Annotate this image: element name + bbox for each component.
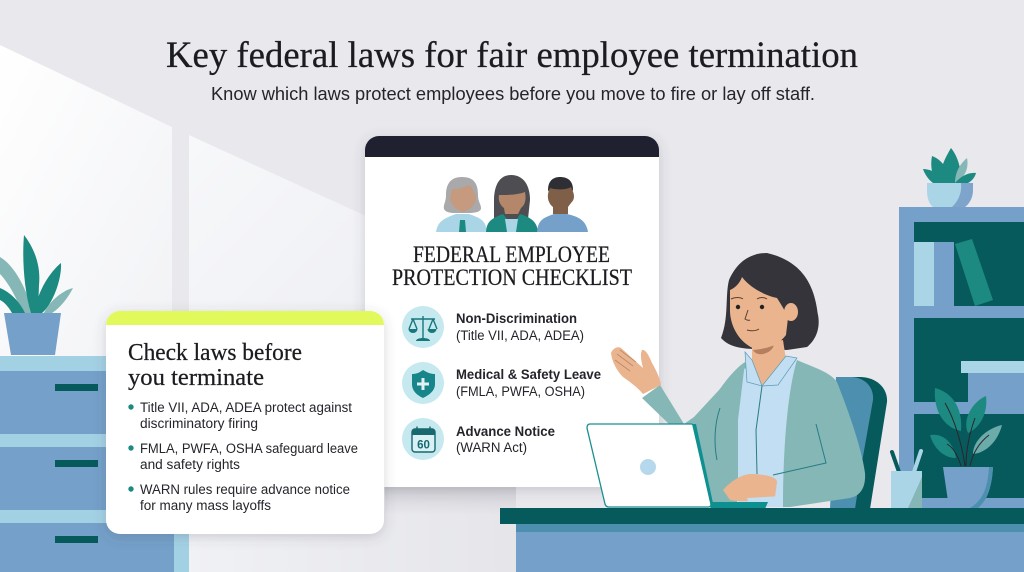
icon: shield with cross: [402, 362, 444, 404]
hair back: [721, 253, 819, 350]
item: advance notice: (WARN Act): [456, 440, 527, 455]
panel: check laws before you terminate: [106, 311, 384, 534]
item: advance notice: [402, 418, 555, 460]
eyes and mouth: [731, 298, 767, 331]
pencil cup: [891, 451, 922, 508]
icon: desk plant: [930, 388, 1002, 508]
checklist heading: [392, 242, 632, 290]
bullet: WARN rules: WARN rules require advance notice: [140, 482, 350, 497]
item: advance notice: Advance Notice: [456, 424, 555, 439]
subtitle: Know which laws protect employees before you move to fire or lay off staff.: [211, 84, 815, 104]
icon: plant on bookcase: [923, 148, 976, 207]
panel: federal employee protection checklist: [365, 136, 659, 487]
raised hand: [611, 347, 661, 394]
bullet: discrimination laws: [128, 400, 352, 431]
icon: three employees: [436, 175, 588, 232]
clothing seams: [715, 386, 826, 475]
bullet: WARN rules: for many mass layoffs: [140, 498, 271, 513]
laptop: [587, 424, 768, 509]
face: [730, 277, 788, 349]
bullet: discrimination laws: Title VII, ADA, ADEA protect against: [140, 400, 352, 415]
item: medical and safety leave: [402, 362, 601, 404]
item: medical and safety leave: (FMLA, PWFA, OSHA): [456, 384, 585, 399]
desk: [500, 508, 1024, 572]
icon: calendar 60: 60: [417, 440, 430, 452]
bookcase: [899, 207, 1024, 509]
left filing cabinet: [0, 356, 189, 572]
bullet: leave and safety laws: [128, 441, 358, 472]
checklist heading: PROTECTION CHECKLIST: [392, 265, 632, 290]
books: [914, 239, 993, 306]
cardigan right side: [783, 360, 865, 507]
checklist heading: FEDERAL EMPLOYEE: [413, 242, 610, 267]
icon: calendar 60: [402, 418, 444, 460]
lime card header: [106, 311, 384, 325]
item: medical and safety leave: Medical & Safety Leave: [456, 367, 601, 382]
woman at desk: [611, 253, 865, 507]
bullet: discrimination laws: discriminatory firing: [140, 416, 258, 431]
cardigan left front: [700, 362, 745, 507]
card heading: Check laws before: [128, 340, 302, 366]
item: non-discrimination: (Title VII, ADA, ADEA): [456, 328, 584, 343]
card heading: [128, 340, 302, 391]
item: non-discrimination: [402, 306, 584, 348]
bullet: leave and safety laws: and safety rights: [140, 457, 240, 472]
collar: [745, 352, 797, 386]
card heading: you terminate: [128, 365, 264, 391]
bullet: leave and safety laws: FMLA, PWFA, OSHA safeguard leave: [140, 441, 358, 456]
title: Key federal laws for fair employee termination: [166, 35, 858, 76]
bullet: WARN rules: [128, 482, 350, 513]
icon: left potted plant: [0, 235, 73, 355]
ear: [784, 303, 798, 321]
blouse: [738, 358, 797, 507]
typing hand: [723, 474, 777, 501]
item: non-discrimination: Non-Discrimination: [456, 311, 577, 326]
office chair: [830, 377, 887, 509]
icon: scales of justice: [402, 306, 444, 348]
left arm: [642, 362, 760, 507]
neck: [752, 340, 786, 386]
checklist header bar: [365, 136, 659, 157]
